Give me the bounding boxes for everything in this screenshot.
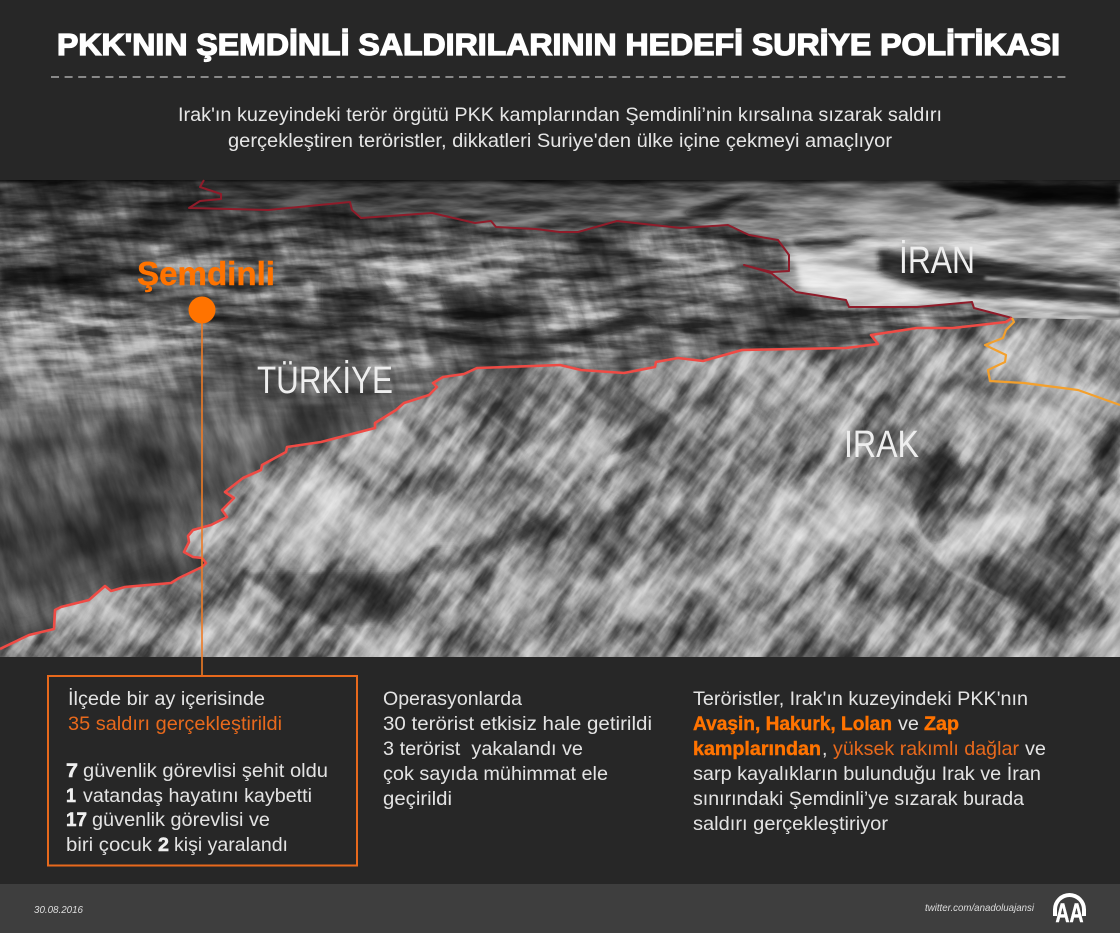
border: Turkey-Iran: [189, 180, 1012, 318]
icon: AA logo: AA: [1056, 898, 1084, 928]
text block: operations: geçirildi: [383, 788, 452, 810]
text block: camps: yüksek rakımlı dağlar: [833, 738, 1020, 760]
callout box: attacks: kişi yaralandı: [174, 834, 288, 856]
callout box: attacks: 2: [158, 834, 169, 856]
callout box: attacks: güvenlik görevlisi şehit oldu: [83, 760, 328, 782]
subtitle: Irak'ın kuzeyindeki terör örgütü PKK kamplarından Şemdinli’nin kırsalına sızarak saldırı: [178, 105, 942, 126]
callout box: attacks: güvenlik görevlisi ve: [92, 809, 270, 831]
text block: camps: kamplarından: [693, 738, 821, 760]
callout box: attacks: vatandaş hayatını kaybetti: [83, 785, 312, 807]
text block: camps: [693, 688, 1046, 835]
subtitle: gerçekleştiren teröristler, dikkatleri Suriye'den ülke içine çekmeyi amaçlıyor: [228, 131, 893, 152]
header panel: [0, 0, 1120, 180]
callout box: attacks: İlçede bir ay içerisinde: [68, 687, 265, 710]
subtitle: [178, 105, 942, 152]
border: Iran-Iraq: [985, 318, 1120, 405]
footer bar: [0, 884, 1120, 933]
country label: TÜRKİYE: TÜRKİYE: [257, 359, 393, 402]
callout box: attacks: 35 saldırı gerçekleştirildi: [68, 713, 282, 735]
region: Iran: [192, 180, 1120, 320]
callout box: attacks: 1: [66, 785, 76, 807]
social handle: twitter.com/anadoluajansi: [925, 902, 1035, 914]
marker: Şemdinli: [188, 296, 216, 324]
country label: IRAK: IRAK: [844, 424, 919, 466]
callout box: attacks: [48, 676, 357, 866]
text block: camps: Teröristler, Irak'ın kuzeyindeki PKK'nın: [693, 688, 1028, 710]
text block: operations: 3 terörist yakalandı ve: [383, 738, 583, 760]
border: Turkey-Iraq: [0, 318, 1012, 649]
terrain map: [0, 180, 1120, 657]
connector line from Şemdinli: [201, 310, 203, 677]
icon: AA logo: [1053, 893, 1086, 928]
text block: operations: çok sayıda mühimmat ele: [383, 763, 608, 785]
text block: camps: ,: [822, 738, 827, 760]
text block: camps: Zap: [924, 713, 959, 735]
date: 30.08.2016: [34, 905, 83, 916]
text block: camps: ve: [898, 713, 919, 735]
text block: operations: Operasyonlarda: [383, 688, 522, 710]
text block: operations: 30 terörist etkisiz hale getirildi: [383, 713, 652, 735]
label: Şemdinli: Şemdinli: [137, 255, 275, 292]
text block: camps: ve: [1025, 738, 1046, 760]
text block: camps: sarp kayalıkların bulunduğu Irak ve İran: [693, 762, 1041, 785]
text block: camps: saldırı gerçekleştiriyor: [693, 813, 889, 835]
text block: operations: [383, 688, 652, 810]
region: Iraq: [0, 318, 1120, 657]
title: PKK'NIN ŞEMDİNLİ SALDIRILARININ HEDEFİ SURİYE POLİTİKASI: [57, 27, 1060, 62]
text block: camps: Avaşin, Hakurk, Lolan: [693, 713, 892, 735]
region: Turkey: [0, 180, 1008, 648]
callout box: attacks: biri çocuk: [66, 834, 152, 856]
callout box: attacks: 7: [66, 760, 78, 782]
country label: İRAN: İRAN: [899, 239, 975, 282]
bottom panel: [0, 657, 1120, 884]
text block: camps: sınırındaki Şemdinli’ye sızarak burada: [693, 788, 1024, 810]
callout box: attacks: 17: [66, 809, 87, 831]
